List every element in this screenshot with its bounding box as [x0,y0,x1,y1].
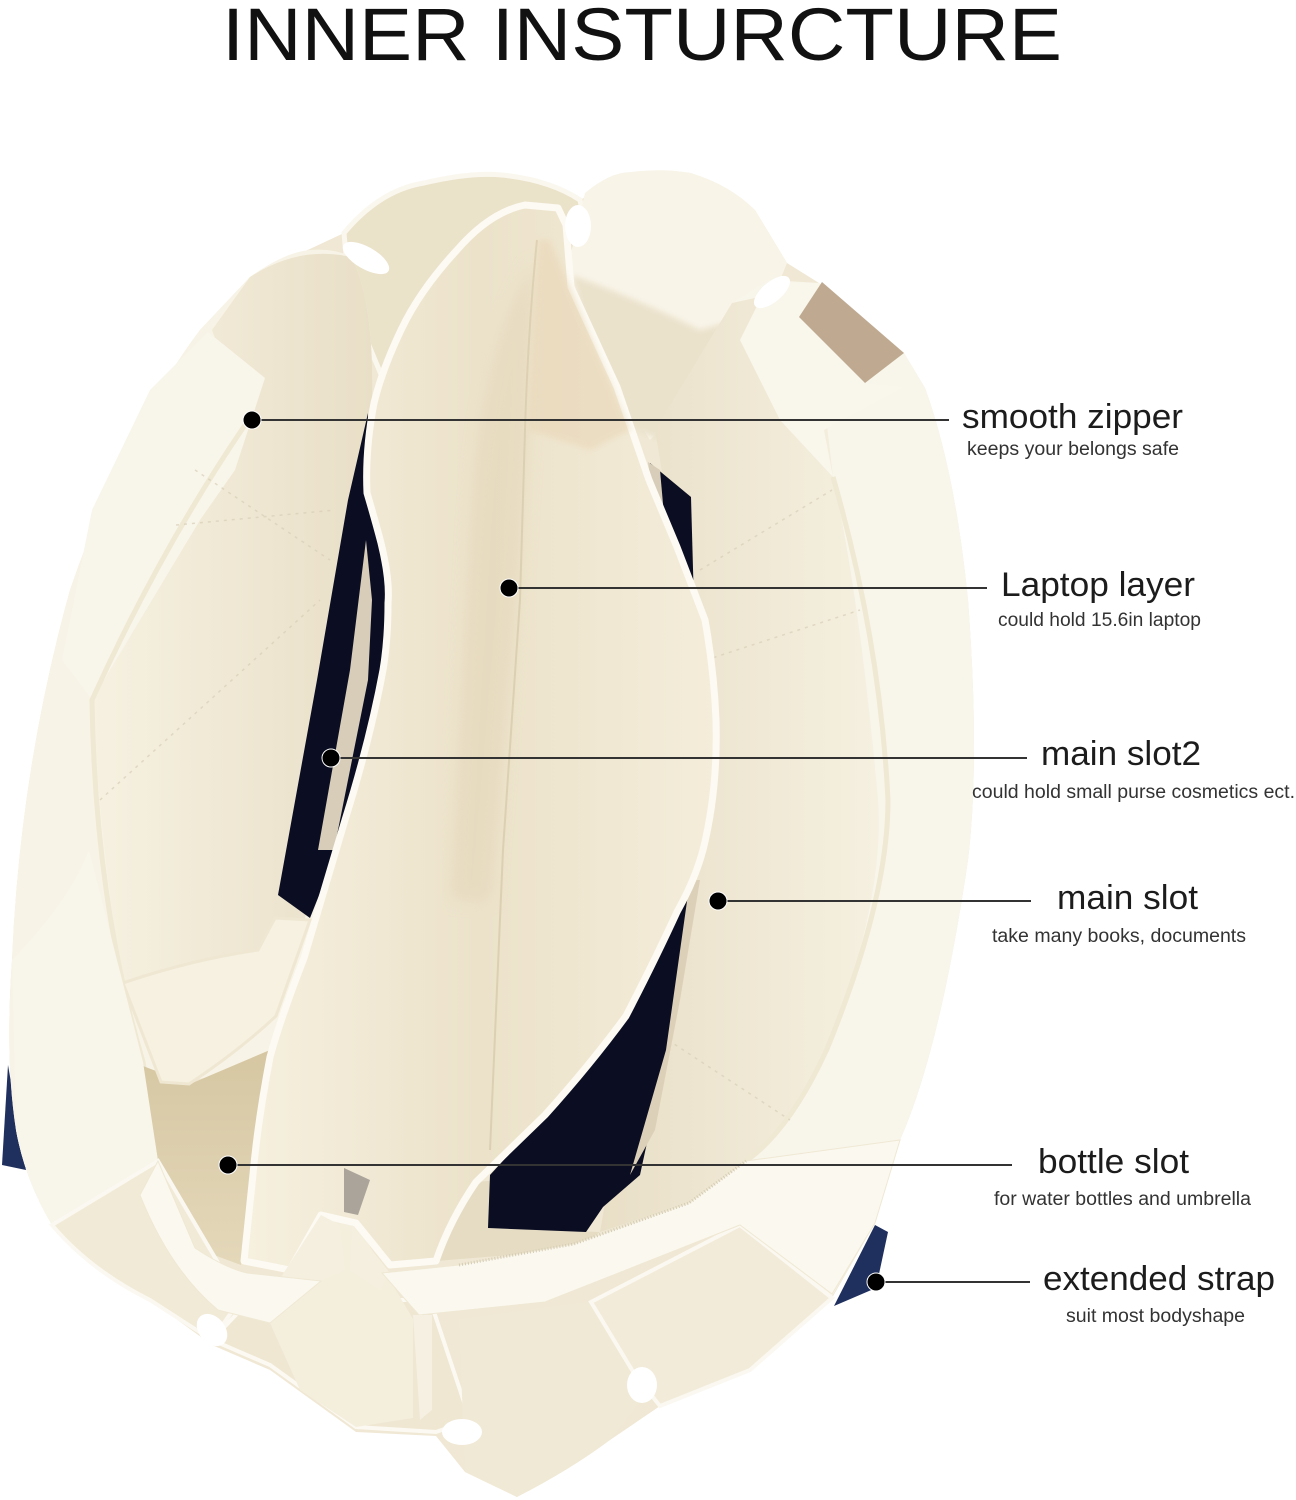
left collar flap [62,332,265,700]
callout: main slot2: could hold small purse cosmetics ect. [972,782,1295,803]
callout: bottle slot: for water bottles and umbrella [994,1189,1251,1210]
back left arch panel [344,174,600,420]
callout: smooth zipper: keeps your belongs safe [967,439,1179,460]
leather tag [799,282,904,383]
bottom right pocket [591,1225,832,1406]
callout: laptop layer [500,566,1201,631]
knot top right [749,270,795,314]
centre crease [490,240,537,1150]
callout: main slot: main slot [1057,879,1199,917]
callout: bottle slot: bottle slot [1038,1143,1190,1181]
bottom centre pocket back [212,1300,470,1432]
callout: smooth zipper: smooth zipper [962,398,1183,436]
zipper teeth [459,1161,746,1265]
navy slot lower [488,860,692,1232]
callout: main slot: take many books, documents [992,926,1246,947]
knot bottom right [627,1367,657,1403]
left pocket interior [92,254,372,1030]
cream floor behind lower slot [436,1180,600,1261]
right stitching [668,490,860,1120]
callout: laptop layer: Laptop layer [1001,566,1195,604]
callout: bottle slot [219,1143,1251,1210]
lining strip lower right [630,880,700,1175]
navy slot upper left [278,413,388,918]
right canvas wall [640,280,974,1296]
callout: extended strap: extended strap [1043,1260,1275,1298]
centre fold [528,240,630,450]
left zipper strip [92,425,245,1161]
bag base silhouette [9,172,974,1497]
zipper band right [382,1140,900,1315]
right pocket interior [600,295,879,1232]
centre small pocket [270,1215,413,1427]
zip flap left [281,1215,345,1281]
small strip below band [413,1315,432,1420]
illustration: open tote bag [2,170,974,1497]
left canvas lower strip [12,850,158,1225]
central laptop layer panel [244,205,716,1270]
zip flap right [350,1225,390,1290]
panel shading [450,260,535,900]
zipper band left [140,1161,321,1323]
taupe lining left [318,540,372,850]
bottle slot interior [143,1050,270,1265]
bottom left pocket [52,1161,240,1340]
zipper pull [344,1168,370,1215]
callout: extended strap [867,1260,1275,1327]
bottom tongue pocket [459,1300,645,1497]
left stitching [100,470,335,800]
callout: main slot [709,879,1246,947]
taupe lining right [648,462,668,560]
callout: extended strap: suit most bodyshape [1066,1306,1245,1327]
knot bottom centre [442,1419,482,1445]
navy bag exterior left [2,1065,26,1170]
callout: main slot2: main slot2 [1041,735,1201,773]
knot top centre [565,205,591,247]
back right arch panel [560,170,787,440]
back inner shade [572,275,735,440]
callout: main slot2 [322,735,1295,803]
right collar [740,282,904,477]
navy slot upper right [650,463,695,640]
callout: laptop layer: could hold 15.6in laptop [998,610,1201,631]
knot top left [338,235,394,281]
left side flap pocket [123,918,310,1084]
navy bag exterior right [834,1225,888,1306]
callout: smooth zipper [243,398,1183,460]
left canvas wall [9,250,372,1225]
right zipper strip [746,477,888,1161]
knot bottom left [190,1308,234,1352]
